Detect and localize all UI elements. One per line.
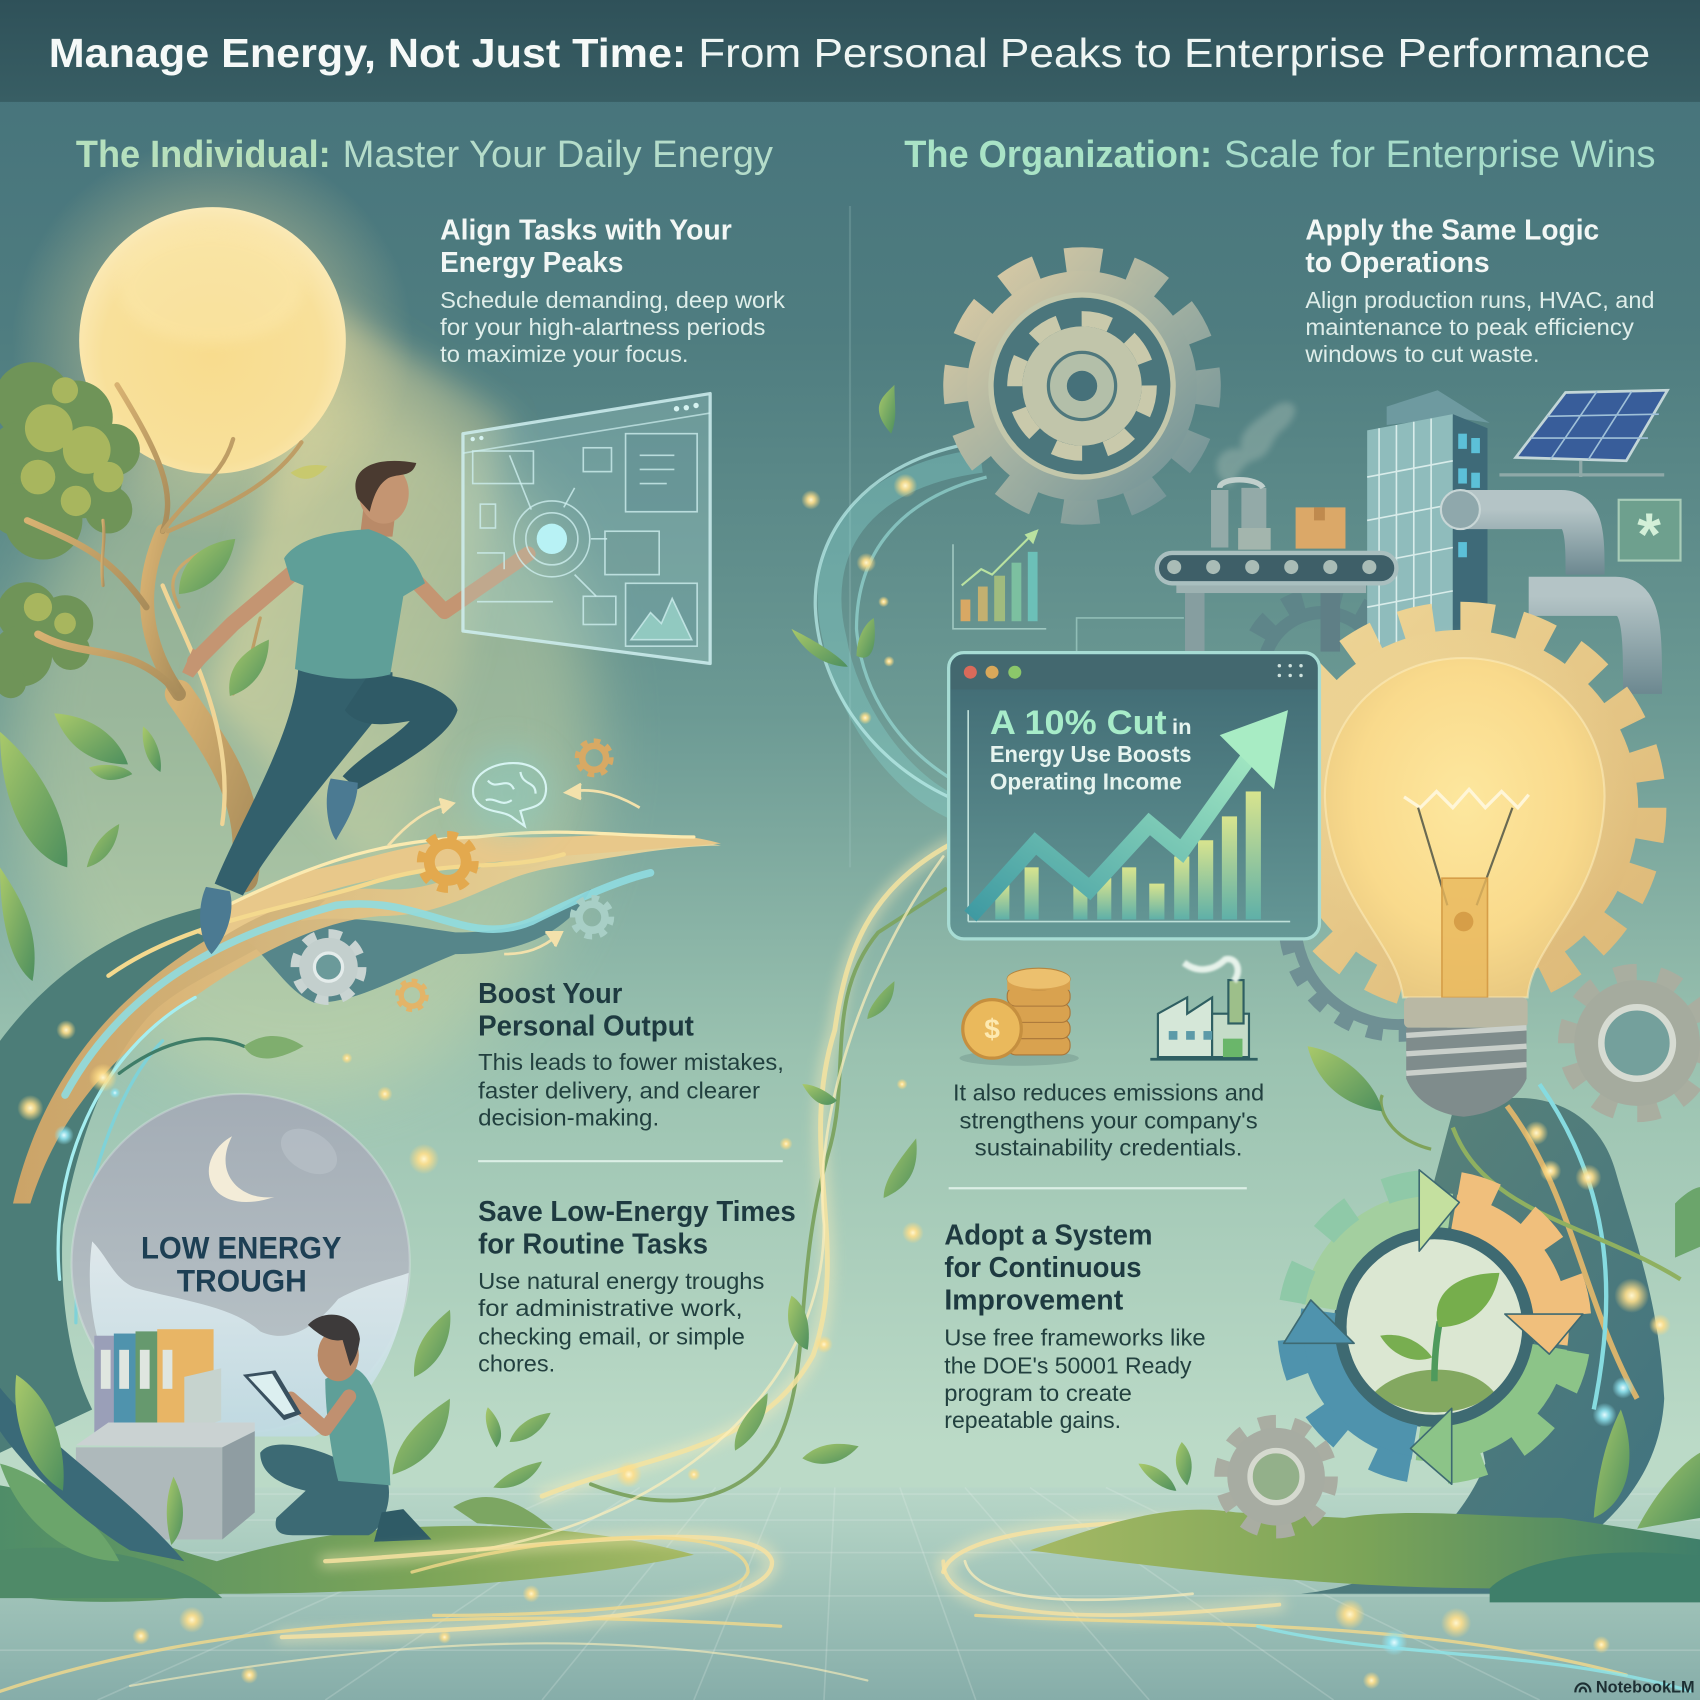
factory scene <box>1077 390 1680 746</box>
arm <box>291 1396 349 1429</box>
text block: align tasks: to maximize your focus. <box>440 341 688 367</box>
icon: small grey gear <box>1222 1422 1330 1531</box>
card text: in <box>1172 714 1192 739</box>
pipes <box>1458 510 1643 694</box>
text block: apply logic: to Operations <box>1305 247 1490 279</box>
icon: small orange gear <box>398 981 426 1009</box>
label: low energy trough: LOW ENERGY <box>141 1231 342 1266</box>
mini bar chart <box>953 529 1046 629</box>
text block: apply logic <box>1304 215 1654 367</box>
text block: adopt a system: for Continuous <box>944 1252 1142 1284</box>
icon: asterisk box <box>1619 500 1680 568</box>
text block: boost output: decision-making. <box>478 1104 659 1130</box>
shirt <box>325 1367 390 1485</box>
text block: align tasks: Align Tasks with Your <box>440 215 732 247</box>
icon: glowing sun <box>12 140 413 541</box>
icon: coins <box>960 968 1079 1066</box>
chart card <box>949 653 1319 939</box>
icon: grey gear right <box>1568 974 1700 1112</box>
text block: adopt a system: the DOE's 50001 Ready <box>944 1353 1192 1379</box>
text block: emissions <box>953 1079 1264 1161</box>
trend arrow <box>970 737 1263 916</box>
heading: organization: Scale for Enterprise Wins <box>1224 134 1656 176</box>
sprout <box>1380 1273 1499 1381</box>
text block: boost output: faster delivery, and clearer <box>478 1077 760 1103</box>
text block: save low-energy <box>478 1196 796 1376</box>
text block: save low-energy: Save Low-Energy Times <box>478 1196 796 1228</box>
text block: adopt a system: repeatable gains. <box>944 1407 1121 1433</box>
floor tiles <box>0 1488 1700 1700</box>
text block: save low-energy: for Routine Tasks <box>478 1228 708 1260</box>
bulb glass <box>1325 658 1605 997</box>
heading: organization: The Organization: <box>904 134 1212 176</box>
icon: large gear <box>957 261 1207 511</box>
head <box>318 1329 359 1381</box>
sparkles <box>17 474 1671 1689</box>
back arm <box>195 564 304 661</box>
icon: gold gear with bulb <box>1272 619 1649 1117</box>
legs <box>215 670 392 896</box>
head <box>359 463 409 524</box>
swirl around large gear <box>791 385 987 808</box>
bulb screw base <box>1404 997 1528 1117</box>
text block: emissions: sustainability credentials. <box>975 1135 1242 1161</box>
smoke <box>1217 402 1295 488</box>
icon: brain <box>466 747 553 838</box>
low energy bubble <box>72 1094 410 1437</box>
tree leaves <box>0 465 327 981</box>
text block: align tasks: for your high-alartness periods <box>440 314 765 340</box>
tablet <box>243 1370 301 1420</box>
box <box>1296 507 1345 549</box>
holographic screen <box>463 394 710 664</box>
watermark: NotebookLM: NotebookLM <box>1596 1678 1695 1696</box>
vine with gold swirl <box>0 843 1691 1691</box>
card text <box>990 704 1192 794</box>
text block: apply logic: windows to cut waste. <box>1304 341 1540 367</box>
text block: align tasks: Energy Peaks <box>440 247 623 279</box>
text block: boost output: This leads to fower mistakes, <box>478 1049 784 1075</box>
foliage <box>0 362 140 698</box>
heading: individual: Master Your Daily Energy <box>343 134 773 176</box>
icon: tan gear <box>578 742 610 774</box>
soft glow under swirl <box>282 843 1279 1637</box>
icon: orange gear <box>422 836 474 888</box>
arrowheads <box>1284 1170 1583 1484</box>
bars <box>995 791 1261 919</box>
text block: boost output: Boost Your <box>478 978 622 1010</box>
text block: adopt a system <box>944 1220 1206 1433</box>
conveyor <box>1157 553 1396 583</box>
background grey gear <box>1286 809 1511 1034</box>
figure: seated man with tablet <box>243 1315 432 1542</box>
icon: grey gear <box>296 935 361 1000</box>
text block: adopt a system: Improvement <box>944 1285 1124 1317</box>
gold ribbon <box>13 840 721 1203</box>
text block: emissions: strengthens your company's <box>960 1108 1258 1134</box>
text block: boost output: Personal Output <box>478 1010 694 1042</box>
card text: A 10% Cut <box>990 704 1167 742</box>
icon: cycle gear with sprout <box>1267 1160 1601 1494</box>
title: Manage Energy, Not Just Time: <box>49 30 686 76</box>
right ground <box>1030 1409 1700 1602</box>
arm reach <box>410 554 528 611</box>
icon: pale gear <box>574 899 610 936</box>
dark mass under gear <box>244 889 591 1003</box>
heading: organization <box>904 134 1656 176</box>
solar panel <box>1516 390 1667 461</box>
label: low energy trough: TROUGH <box>177 1263 307 1298</box>
flowing ribbons <box>0 832 721 1453</box>
card text: Operating Income <box>990 768 1182 794</box>
icon: coins: $ <box>984 1013 1000 1045</box>
header band <box>0 0 1700 102</box>
glow <box>1290 623 1637 970</box>
text block: apply logic: Apply the Same Logic <box>1305 215 1599 247</box>
shoes <box>200 887 231 954</box>
teal ribbon <box>65 873 651 1095</box>
heading: individual: The Individual: <box>76 134 331 176</box>
leaf <box>1308 1046 1382 1111</box>
left panel light wash <box>11 379 596 1095</box>
background gear <box>1249 598 1396 746</box>
icon: asterisk box: * <box>1637 500 1661 568</box>
icon: factory <box>1150 959 1258 1059</box>
segment: green <box>1267 1160 1601 1494</box>
stacks <box>1211 488 1266 548</box>
title <box>49 30 1650 76</box>
tree with foliage <box>0 362 327 981</box>
label: low energy trough <box>141 1231 342 1298</box>
icon: crescent moon <box>209 1136 274 1202</box>
text block: save low-energy: checking email, or simple <box>478 1323 745 1349</box>
dark trunk <box>0 900 325 1453</box>
figure: running man <box>182 461 528 954</box>
text block: save low-energy: Use natural energy troughs <box>478 1268 764 1294</box>
text block: save low-energy: chores. <box>478 1350 555 1376</box>
neck <box>360 510 396 537</box>
card text: Energy Use Boosts <box>990 741 1192 767</box>
ground: left mound <box>0 1310 694 1602</box>
ground plants <box>15 1310 553 1545</box>
centre divider <box>849 206 851 867</box>
trunk under bulb <box>1301 1046 1700 1594</box>
office building <box>1387 390 1490 425</box>
torso shirt <box>284 529 425 679</box>
title: From Personal Peaks to Enterprise Performance <box>698 30 1650 76</box>
text block: save low-energy: for administrative work, <box>478 1295 743 1321</box>
heading: individual <box>76 134 773 176</box>
text block: align tasks: Schedule demanding, deep work <box>440 287 786 313</box>
legs <box>260 1445 389 1535</box>
segment: orange <box>1267 1160 1601 1494</box>
text block: adopt a system: program to create <box>944 1380 1132 1406</box>
icons: flow arrows <box>388 784 640 954</box>
filament <box>1404 789 1529 997</box>
folders and box <box>76 1329 255 1540</box>
text block: adopt a system: Adopt a System <box>944 1220 1152 1252</box>
text block: boost output <box>478 978 784 1130</box>
segment: lower green <box>1267 1160 1601 1494</box>
segment: blue <box>1267 1160 1601 1494</box>
text block: apply logic: maintenance to peak efficiency <box>1305 314 1635 340</box>
text block: adopt a system: Use free frameworks like <box>944 1324 1206 1350</box>
text block: emissions: It also reduces emissions and <box>953 1079 1264 1105</box>
text block: apply logic: Align production runs, HVAC, and <box>1305 287 1654 313</box>
text block: align tasks <box>440 215 786 367</box>
light beam <box>206 304 510 889</box>
